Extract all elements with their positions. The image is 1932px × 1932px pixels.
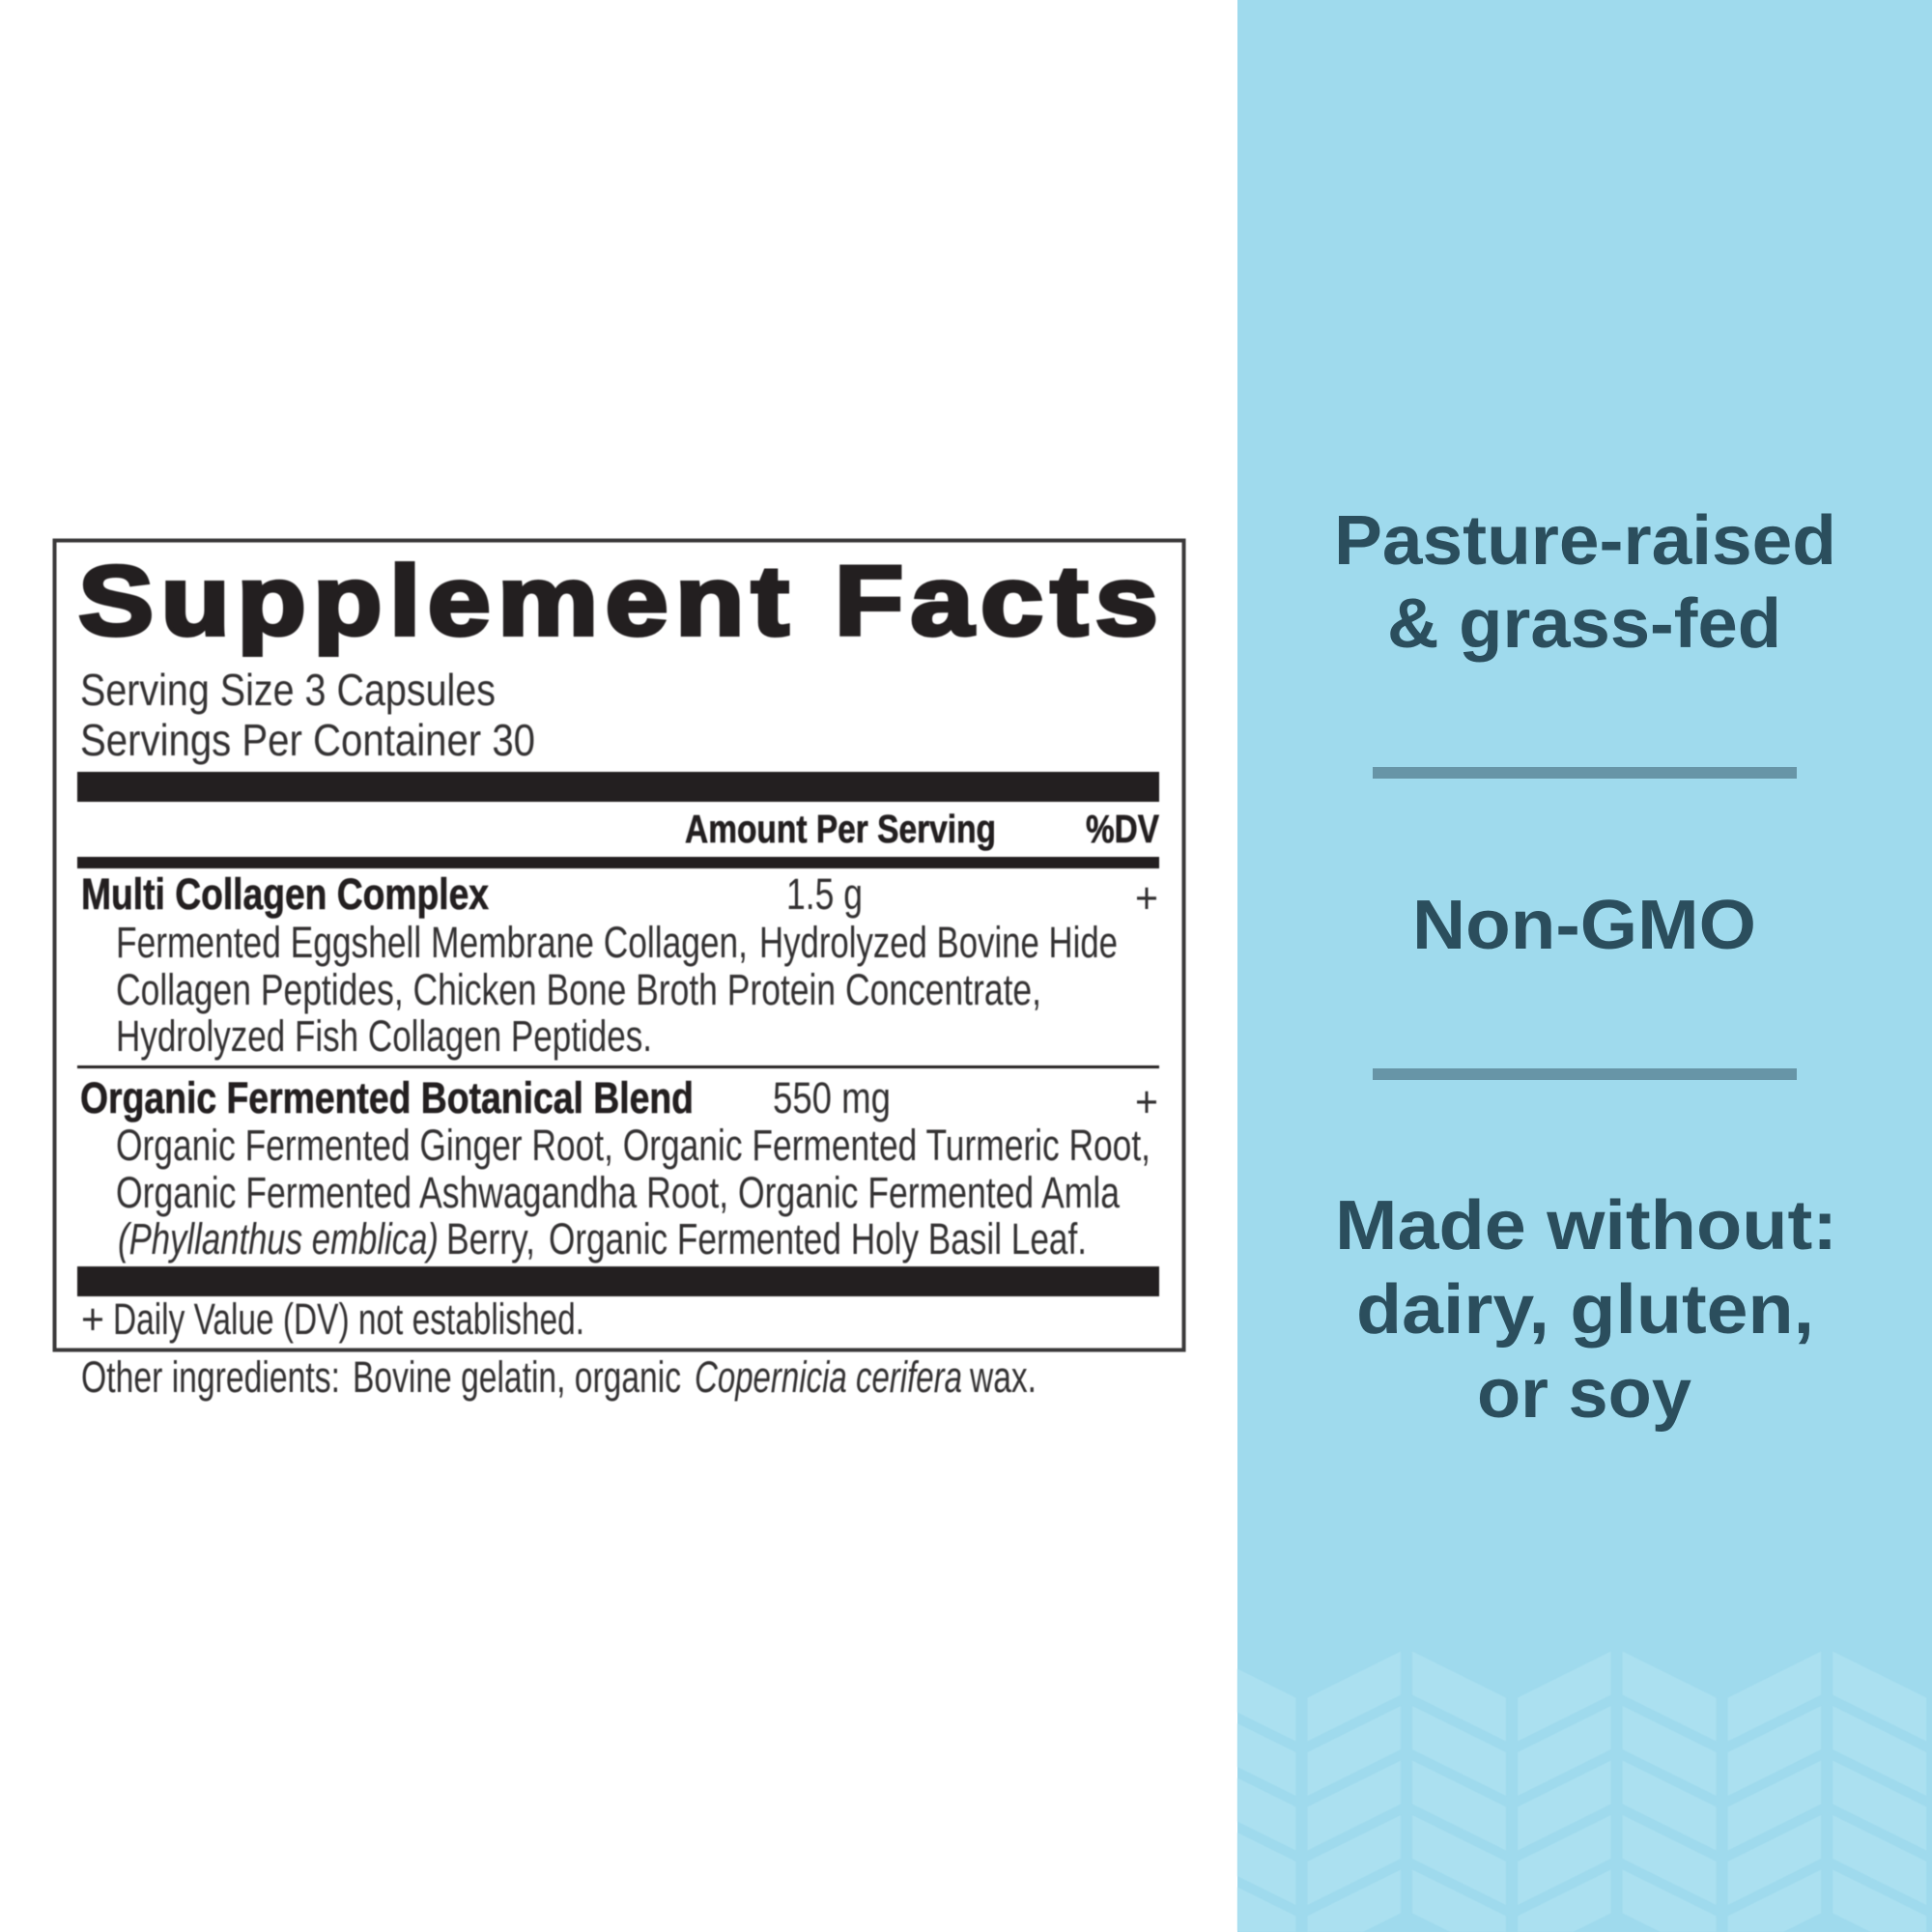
divider one — [1373, 767, 1797, 779]
claim: made without — [1335, 1187, 1837, 1433]
row: Organic Fermented Botanical Blend: 550 mg — [773, 1073, 891, 1122]
claim: non-GMO: Non-GMO — [1412, 887, 1756, 964]
row: Multi Collagen Complex: Collagen Peptides, Chicken Bone Broth Protein Concentrate, — [116, 965, 1041, 1014]
row: Organic Fermented Botanical Blend: Organic Fermented Holy Basil Leaf. — [549, 1214, 1087, 1264]
panel: blue claims — [1237, 0, 1932, 1932]
other ingredients: wax. — [969, 1352, 1037, 1402]
row: Organic Fermented Botanical Blend: (Phyllanthus emblica) — [118, 1214, 439, 1264]
row: Multi Collagen Complex: Multi Collagen Complex — [81, 869, 489, 919]
column headers: Amount Per Serving — [685, 807, 996, 851]
row: Organic Fermented Botanical Blend: Berry, — [446, 1214, 535, 1264]
label border — [54, 541, 1184, 1350]
row: Organic Fermented Botanical Blend: + — [1135, 1077, 1158, 1126]
row: Multi Collagen Complex: Hydrolyzed Fish Collagen Peptides. — [116, 1011, 652, 1061]
row: Organic Fermented Botanical Blend: Organic Fermented Ashwagandha Root, Organic Fermented Amla — [116, 1168, 1121, 1217]
other ingredients — [81, 1352, 1037, 1402]
claim: pasture-raised: & grass-fed — [1387, 585, 1781, 663]
row: Organic Fermented Botanical Blend: Organic Fermented Botanical Blend — [80, 1073, 694, 1122]
thin rule — [77, 1065, 1159, 1068]
medium rule — [77, 857, 1159, 868]
column headers: %DV — [1086, 807, 1160, 851]
row: Multi Collagen Complex — [81, 869, 1158, 1061]
thick rule bottom — [77, 1266, 1159, 1296]
claim: pasture-raised — [1334, 502, 1836, 663]
heading: Supplement Facts: Supplement Facts — [78, 547, 1158, 656]
row: Organic Fermented Botanical Blend — [80, 1073, 1158, 1264]
thick rule top — [77, 772, 1159, 802]
other ingredients: Bovine gelatin, organic — [353, 1352, 681, 1402]
serving info: Serving Size 3 Capsules — [80, 665, 496, 715]
row: Multi Collagen Complex: Hydrolyzed Bovine Hide — [759, 918, 1118, 967]
panel background — [1237, 0, 1932, 1932]
footnote: Daily Value (DV) not established. — [113, 1294, 584, 1344]
serving info: Servings Per Container 30 — [80, 715, 535, 765]
other ingredients: Copernicia cerifera — [695, 1352, 962, 1402]
footnote: + — [81, 1294, 104, 1344]
chevron pattern — [1237, 1640, 1932, 1932]
row: Multi Collagen Complex: 1.5 g — [786, 869, 863, 919]
row: Organic Fermented Botanical Blend: Organic Fermented Ginger Root, Organic Fermented Turmeric Root, — [116, 1121, 1151, 1170]
claim: made without: dairy, gluten, — [1356, 1271, 1814, 1349]
panel: supplement facts label — [54, 541, 1184, 1350]
claim: made without: Made without: — [1335, 1187, 1837, 1264]
claim: made without: or soy — [1477, 1355, 1691, 1433]
serving info — [80, 665, 535, 765]
row: Multi Collagen Complex: Fermented Eggshell Membrane Collagen, — [116, 918, 748, 967]
other ingredients: Other ingredients: — [81, 1352, 340, 1402]
claim: pasture-raised: Pasture-raised — [1334, 502, 1836, 580]
divider two — [1373, 1068, 1797, 1080]
row: Multi Collagen Complex: + — [1135, 873, 1158, 923]
